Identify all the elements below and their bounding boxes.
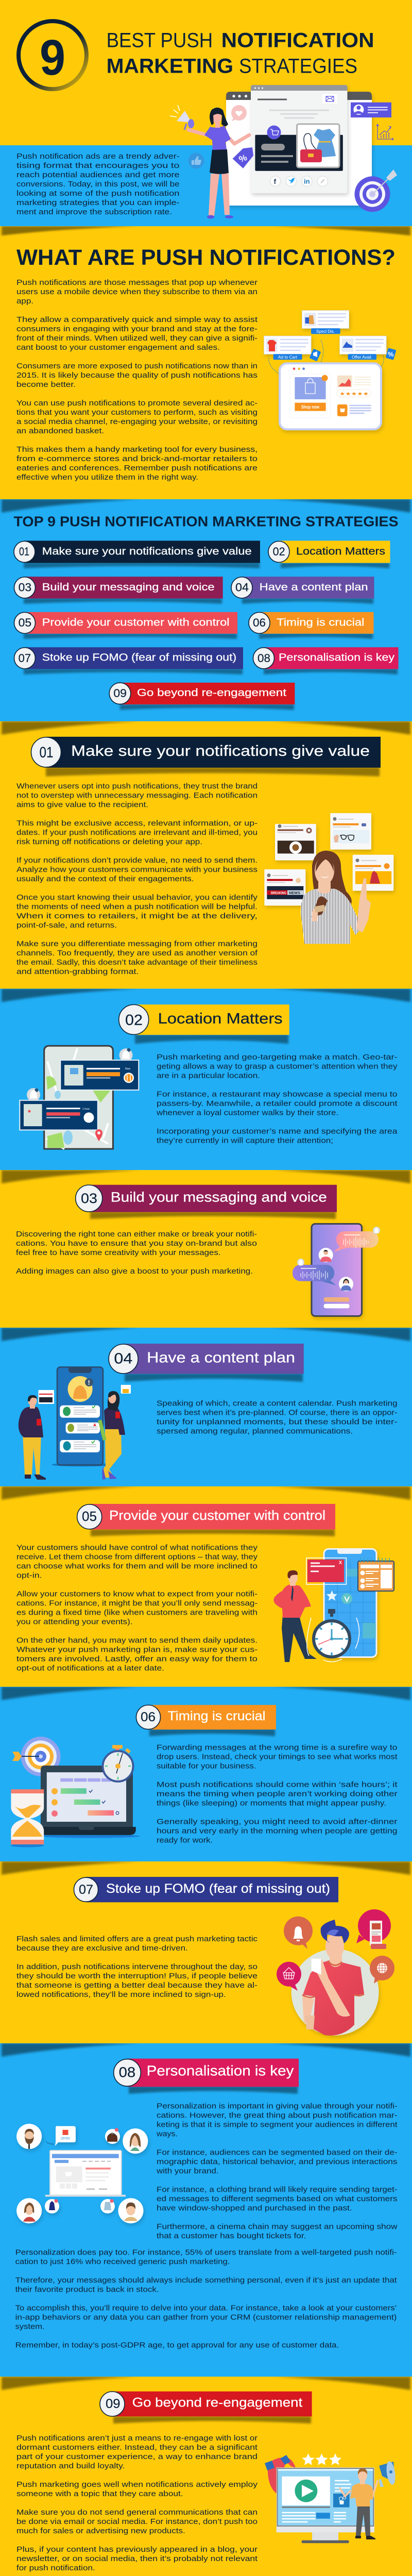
body text right column: For instance, a clothing brand will likely require sending target- (157, 2185, 398, 2194)
body text (16, 1543, 258, 1672)
panel: strategy 06 (0, 1687, 412, 1861)
body text: Push marketing and geo-targeting make a match. Geo-tar- (157, 1053, 398, 1062)
panel: what are push notifications (0, 226, 412, 499)
heading bar 05: Provide your customer with control (109, 1507, 325, 1523)
heading bar 04: 04 (114, 1351, 132, 1367)
intro text: reach potential audiences and get more (16, 171, 179, 179)
body text: Make sure you do not send general communications that can (16, 2508, 258, 2517)
body text: opt-in. (16, 1571, 42, 1580)
body text: they’re currently in will capture their attention; (157, 1137, 333, 1145)
list item 03 (14, 577, 223, 604)
intro text: ment and improve the subscription rate. (16, 208, 172, 216)
body text: and attention-grabbing format. (16, 968, 139, 976)
list item 08: Personalisation is key (279, 652, 394, 664)
body text full width: Remember, in today’s post-GDPR age, to get approval for any use of customer data. (15, 2341, 339, 2349)
heading bar 07: 07 (79, 1883, 93, 1897)
heading bar 04 (109, 1344, 304, 1382)
badge: number 9: 9 (40, 29, 65, 86)
body text (16, 278, 258, 482)
body text: dates. If your push notifications are irrelevant and ill-timed, you (16, 828, 258, 837)
body text: point-of-sale, and returns. (16, 921, 117, 930)
body text (16, 2434, 258, 2572)
illustration: woman with phone and notification cards: BREAKING (271, 891, 286, 895)
list item 03: Build your messaging and voice (42, 582, 215, 593)
body text: aims to give value to the recipient. (16, 801, 148, 809)
body text: become better. (16, 380, 76, 389)
body text: an abandoned basket. (16, 427, 104, 435)
heading bar 02: Location Matters (158, 1011, 283, 1027)
illustration: phone with voice messages (293, 1224, 380, 1316)
body text full width: system. (15, 2322, 45, 2331)
illustration: man, phone, clock and calendar (273, 1548, 394, 1662)
intro text: tising format that encourages you to (16, 161, 179, 170)
list item 04 (231, 577, 374, 604)
illustration: woman with megaphone and web pages: f (274, 177, 276, 185)
list item 06 (249, 612, 374, 639)
heading bar 05 (77, 1504, 335, 1536)
body text: serves best when it’s pre-planned. Of course, there is an oppor- (157, 1408, 398, 1417)
body text: be done via email or social media. For instance, don’t push too (16, 2517, 258, 2526)
list item 01 (14, 541, 260, 568)
body text: Allow your customers to know what to expect from your notifi- (16, 1589, 258, 1598)
body text: someone with a topic that they care about. (16, 2489, 183, 2498)
heading bar 09 (100, 2392, 312, 2424)
body text right column: keting is that it is simple to segment your audiences in different (157, 2120, 398, 2129)
body text right column: cations. However, the great thing about push notification mar- (157, 2111, 398, 2120)
heading bar 04: Have a content plan (147, 1350, 295, 1366)
body text: cations. You have to ensure that you stay on-brand but also (16, 1239, 257, 1248)
illustration: monitor with video, magnet and man with megaphone (265, 2453, 397, 2543)
body text: Push notifications aren’t just a means to re-engage with lost or (16, 2434, 258, 2443)
panel: top 9 strategies list (0, 499, 412, 721)
list item 02: Location Matters (296, 546, 385, 557)
body text: When it comes to retailers, it might be at the delivery, (16, 912, 258, 921)
body text: Once you start knowing their usual behavior, you can identify (16, 893, 258, 902)
body text: feel free to have some creativity with your messages. (16, 1248, 221, 1257)
body text: tunity for unplanned moments, but these should be inter- (157, 1417, 398, 1426)
list item 08: 08 (258, 652, 270, 665)
body text: lowed notifications, they’ll be more inclined to sign-up. (16, 1990, 226, 1999)
illustration: man, phone, clock and calendar: X (339, 1560, 342, 1565)
body text: tomers are involved. Lastly, offer an easy way for them to (16, 1654, 258, 1663)
body text (157, 1399, 398, 1435)
illustration: notification cards and storefront window: Specl Dis. (316, 329, 335, 334)
body text: This might be exclusive access, relevant information, or up- (16, 819, 258, 828)
body text: Forwarding messages at the wrong time is a surefire way to (157, 1743, 398, 1752)
panel: strategy 07 (0, 1861, 412, 2043)
list item 07: 07 (19, 652, 31, 665)
panel: strategy 05 (0, 1486, 412, 1687)
body text (156, 1053, 398, 1145)
body text: hours and very early in the morning when people are getting (157, 1826, 398, 1835)
heading bar 02 (119, 1005, 289, 1044)
body text: spersed among regular, planned communications. (157, 1427, 353, 1435)
panel: strategy 09 (0, 2377, 412, 2576)
illustration: woman with megaphone and web pages (170, 85, 397, 218)
body text: You can use push notifications to promote several desired ac- (16, 399, 258, 408)
intro text: looking at some of the push notification (16, 189, 179, 198)
list item 06: Timing is crucial (277, 617, 365, 628)
body text: from e-commerce stores and brick-and-mortar retailers to (16, 454, 258, 463)
body text: because they are exclusive and time-driven. (16, 1944, 188, 1953)
body text: Whatever your push marketing plan is, make sure your cus- (16, 1645, 258, 1654)
heading bar 09: 09 (106, 2397, 121, 2411)
body text: passers-by. Meanwhile, a retailer could promote a discount (157, 1099, 398, 1108)
body text right column: mographic data, historical behavior, and previous interactions (157, 2157, 398, 2166)
illustration: woman with phone and notification cards: NEWS (289, 891, 300, 895)
body text: Discovering the right tone can either make or break your notifi- (16, 1230, 257, 1239)
illustration: two people and phone with content plan: ! (88, 1379, 90, 1386)
body text: a social media channel, re-engaging your website, or revisiting (16, 417, 258, 426)
illustration: customers around a shopping site: OFFER (61, 2137, 70, 2141)
body text: 2015. It is likely because the quality of push notifications has (16, 371, 258, 380)
illustration: notification cards and storefront window: Shop now (301, 404, 320, 410)
heading bar 03: 03 (81, 1191, 97, 1206)
body text: risk turning off notifications or deleting your app. (16, 838, 202, 846)
illustration: customers around a shopping site (16, 2124, 148, 2224)
panel: strategy 08 (0, 2043, 412, 2377)
body text: Make sure you differentiate messaging from other marketing (16, 940, 258, 948)
list item 09 (109, 683, 295, 710)
body text: the email. Sadly, this doesn’t take advantage of their timeliness (16, 958, 258, 967)
list item 08 (253, 647, 399, 674)
body text: cant boost to your customer engagement and sales. (16, 343, 220, 352)
body text full width: To accomplish this, you’ll require to delve into your data. For instance, take a look at your customers’ (15, 2303, 397, 2312)
body text: channels. Too frequently, they are used as another version of (16, 949, 258, 958)
body text: not to overstep with unnecessary messaging. Each notification (16, 791, 258, 800)
heading bar 01: Make sure your notifications give value (71, 743, 370, 759)
body text: much for sales or advertising new products. (16, 2527, 185, 2535)
body text: can choose what works for them and will be more inclined to (16, 1562, 258, 1570)
body text: things (like sleeping) or moments that might appear pushy. (157, 1799, 386, 1807)
body text: whenever a loyal customer walks by their store. (156, 1109, 338, 1117)
body text: Flash sales and limited offers are a great push marketing tactic (16, 1935, 258, 1943)
heading bar 02: 02 (125, 1012, 143, 1028)
body text full width (15, 2248, 397, 2349)
list item 02 (268, 541, 390, 568)
body text: Analyze how your customers communicate with your business (16, 866, 258, 874)
body text: they should be worth the interruption! Plus, if people believe (16, 1972, 258, 1980)
list item 04: 04 (235, 581, 249, 594)
illustration: phone with map and location notifications: Now (125, 1067, 130, 1071)
list item 05: Provide your customer with control (42, 617, 230, 628)
list item 05: 05 (19, 616, 31, 629)
title: NOTIFICATION (221, 29, 374, 52)
body text right column: Personalization is important in giving value through your notifi- (157, 2102, 398, 2110)
illustration: notification cards and storefront window: ★★★★★ (339, 392, 369, 397)
body text: Whenever users opt into push notifications, they trust the brand (16, 782, 258, 791)
body text: Speaking of which, create a content calendar. Push marketing (157, 1399, 398, 1408)
list item 01: Make sure your notifications give value (42, 546, 252, 557)
list item 04: Have a content plan (260, 582, 368, 593)
body text: In addition, push notifications intervene throughout the day, so (16, 1962, 258, 1971)
body text: es during a fixed time (like when customers are traveling with (16, 1608, 258, 1617)
body text: geting allows a way to grasp a customer’s attention when they (157, 1062, 398, 1071)
body text: means the timing when people aren’t working doing other (157, 1789, 398, 1798)
list item 09: Go beyond re-engagement (137, 687, 287, 699)
panel: strategy 04 (0, 1328, 412, 1486)
intro text: conversions. Today, in this post, we will be (16, 180, 179, 189)
body text: Plus, if your content has previously appeared in a blog, your (16, 2545, 258, 2554)
body text: newsletter, or on social media, then it’s probably not relevant (16, 2554, 258, 2563)
body text right column: ed messages to different segments based on what customers (157, 2194, 398, 2203)
heading bar 06 (136, 1705, 276, 1736)
heading bar 01: 01 (39, 744, 54, 761)
body text (16, 782, 258, 976)
intro text: marketing strategies that you can imple- (16, 198, 179, 207)
body text: app. (16, 297, 33, 306)
body text: Adding images can also give a boost to your push marketing. (16, 1267, 253, 1276)
illustration: notification cards and storefront window: % (388, 350, 394, 358)
title: BEST PUSH (107, 29, 213, 52)
body text full width: in-app behaviors or any data you can gather from your CRM (customer relationship management) (15, 2313, 397, 2321)
illustration: phone with map and location notifications: 1 hour (82, 1108, 90, 1111)
heading bar 03: Build your messaging and voice (111, 1190, 327, 1205)
body text right column: that a customer has bought tickets for. (157, 2231, 306, 2240)
list item 09: 09 (113, 687, 127, 700)
body text (16, 1230, 257, 1276)
body text: are in a particular location. (157, 1072, 260, 1080)
list item 01: 01 (19, 545, 29, 558)
body text: tions that you want your customers to perform, such as visiting (16, 408, 258, 417)
body text (16, 1935, 258, 1999)
body text: part of your customer experience, a way to enhance brand (16, 2452, 258, 2461)
body text full width: Personalization does pay too. For instance, 55% of users translate from a well-targeted push notifi- (15, 2248, 397, 2257)
heading bar 05: 05 (82, 1509, 97, 1524)
illustration: notification cards and storefront window: Ad to Cart (278, 354, 298, 360)
body text: consumers in engaging with your brand and stay at the fore- (16, 325, 258, 333)
heading bar 06: 06 (141, 1710, 156, 1724)
body text: ready for work. (157, 1836, 213, 1844)
body text: For instance, a restaurant may showcase a special menu to (157, 1090, 398, 1099)
body text: Push marketing goes well when notifications actively employ (16, 2480, 258, 2489)
body text: Consumers are more exposed to push notifications now than in (16, 362, 258, 370)
body text right column: with your brand. (156, 2166, 218, 2175)
illustration: notification cards and storefront window (264, 311, 396, 429)
panel: hero (0, 0, 412, 226)
heading bar 09: Go beyond re-engagement (132, 2396, 302, 2410)
body text: receive. Let them choose from different options – that way, they (16, 1552, 258, 1561)
body text: This makes them a handy marketing tool for every business, (16, 445, 258, 454)
body text: you or attending your events). (16, 1617, 133, 1626)
heading: WHAT ARE PUSH NOTIFICATIONS? (16, 245, 396, 270)
body text (157, 1743, 398, 1844)
body text: eateries and conferences. Remember push notifications are (16, 464, 258, 472)
body text right column: For instance, audiences can be segmented based on their de- (157, 2148, 398, 2157)
body text: If your notifications don’t provide value, no need to send them. (16, 856, 258, 865)
heading: TOP 9 PUSH NOTIFICATION MARKETING STRATEGIES (13, 514, 399, 530)
body text right column: have window-shopped and purchased in the past. (157, 2204, 352, 2212)
illustration: man with phone and notification bubbles (277, 1909, 394, 2036)
heading bar 08: Personalisation is key (147, 2062, 294, 2078)
illustration: woman with megaphone and web pages: in (304, 177, 310, 185)
body text right column (156, 2102, 398, 2240)
heading bar 01 (31, 737, 381, 776)
panel: strategy 03 (0, 1170, 412, 1328)
body text: suitable for your business. (157, 1761, 256, 1770)
body text full width: cation to just 16% who received generic push marketing. (15, 2257, 230, 2266)
badge: number 9 (19, 21, 87, 89)
body text: users use a mobile device when they subscribe to them via an (16, 287, 258, 296)
intro text (16, 152, 179, 216)
illustration: notification cards and storefront window: Offer Avail. (352, 354, 372, 360)
list item 05 (14, 612, 237, 639)
heading bar 08 (114, 2059, 299, 2094)
illustration: two people and phone with content plan (19, 1367, 131, 1480)
body text: the moments of need when a push notification will be helpful. (16, 903, 258, 911)
illustration: phone with map and location notifications (20, 1046, 139, 1149)
body text: for push notification. (16, 2564, 95, 2572)
list item 02: 02 (273, 545, 285, 558)
heading bar 03 (76, 1185, 337, 1219)
title: STRATEGIES (239, 55, 357, 77)
list item 06: 06 (253, 616, 266, 629)
heading bar 06: Timing is crucial (168, 1709, 266, 1723)
panel: strategy 01 (0, 721, 412, 989)
body text: Incorporating your customer’s name and specifying the area (157, 1127, 398, 1136)
list item 07: Stoke up FOMO (fear of missing out) (42, 652, 236, 664)
body text: drop users. Instead, check your timings to see what works most (157, 1752, 398, 1761)
body text: usually and the context of their engagements. (16, 875, 194, 884)
illustration: woman with megaphone and web pages: % (237, 152, 248, 164)
body text right column: Furthermore, a cinema chain may suggest an upcoming show (157, 2222, 398, 2231)
body text: cations. For instance, it might be that you’ll only send messag- (16, 1599, 258, 1607)
body text: On the other hand, you may want to send them daily updates. (16, 1636, 258, 1645)
body text: They allow a comparatively quick and simple way to assist (16, 315, 258, 324)
heading bar 08: 08 (119, 2064, 135, 2080)
panel: strategy 02 (0, 989, 412, 1170)
body text: opt-out of notifications at a later date. (16, 1664, 164, 1672)
body text full width: their favorite product is back in stock. (15, 2285, 159, 2294)
body text: Your customers should have control of what notifications they (16, 1543, 258, 1552)
illustration: woman with phone and notification cards (264, 813, 393, 944)
heading bar 07: Stoke up FOMO (fear of missing out) (106, 1882, 330, 1896)
body text: effective when you utilize them in the right way. (16, 473, 198, 482)
body text: dormant customers either. Instead, they can be a significant (16, 2443, 258, 2452)
body text: reputation and build loyalty. (16, 2462, 125, 2470)
title (107, 29, 374, 77)
body text: front of their minds. When utilized well, they can give a signifi- (16, 334, 258, 343)
body text: that someone is getting a better deal because they have al- (16, 1981, 258, 1990)
list item 07 (14, 647, 243, 674)
illustration: target, laptop schedule, stopwatch and hourglass (11, 1737, 140, 1848)
body text: Generally speaking, you might need to avoid after-dinner (157, 1817, 398, 1826)
body text right column: ways. (156, 2129, 178, 2138)
body text: Most push notifications should come within ‘safe hours’; it (157, 1780, 398, 1789)
intro text: Push notification ads are a trendy adver- (16, 152, 179, 161)
title: MARKETING (107, 55, 233, 77)
list item 03: 03 (19, 581, 31, 594)
heading bar 07 (74, 1877, 338, 1902)
body text full width: Therefore, your messages should always include something personal, even if it’s just an update that (15, 2276, 397, 2284)
body text: Push notifications are those messages that pop up whenever (16, 278, 258, 287)
